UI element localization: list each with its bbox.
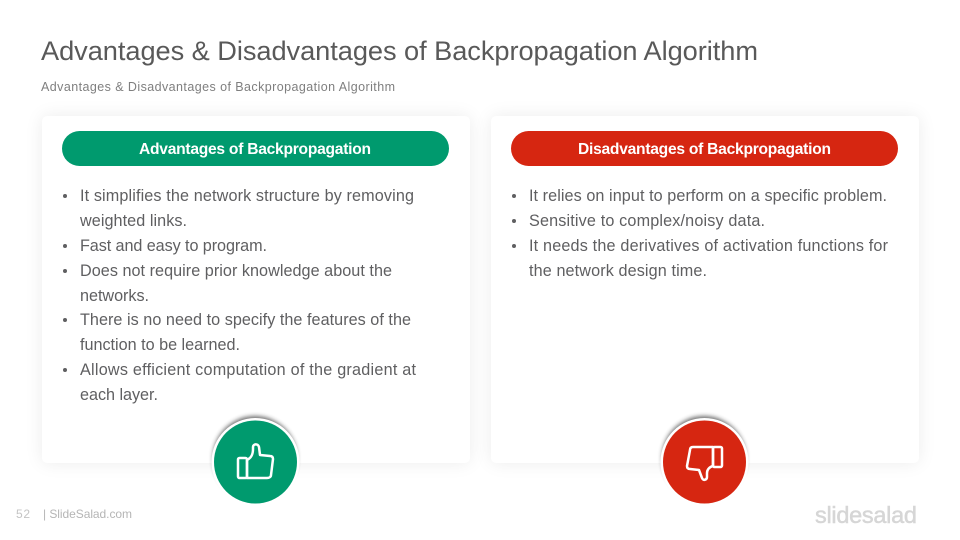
disadvantages header pill: Disadvantages of Backpropagation <box>578 141 831 158</box>
footer source: | SlideSalad.com <box>43 507 132 521</box>
advantages list: It simplifies the network structure by removing <box>80 187 414 205</box>
advantages header pill: Advantages of Backpropagation <box>139 141 371 158</box>
icon: thumbs down badge <box>660 416 748 506</box>
advantages list: Allows efficient computation of the gradient at <box>80 361 416 379</box>
disadvantages list: Sensitive to complex/noisy data. <box>529 212 765 230</box>
panel: advantages card <box>42 116 470 463</box>
page number: 52 <box>16 507 30 521</box>
title: Advantages & Disadvantages of Backpropagation Algorithm <box>41 35 758 66</box>
disadvantages list: the network design time. <box>529 262 707 280</box>
advantages list: weighted links. <box>79 212 187 230</box>
logo: slidesalad <box>815 502 917 528</box>
panel: disadvantages card <box>491 116 919 463</box>
advantages list: function to be learned. <box>80 336 240 354</box>
disadvantages list: It relies on input to perform on a specific problem. <box>529 187 887 205</box>
advantages header pill <box>62 131 449 166</box>
disadvantages header pill <box>511 131 898 166</box>
disadvantages list: It needs the derivatives of activation functions for <box>529 237 889 255</box>
icon: thumbs up badge <box>212 416 300 506</box>
advantages list: There is no need to specify the features of the <box>80 311 411 329</box>
advantages list: Does not require prior knowledge about the <box>80 262 392 280</box>
advantages list: each layer. <box>80 386 158 404</box>
advantages list: Fast and easy to program. <box>80 237 267 255</box>
advantages list <box>63 187 416 404</box>
advantages list: networks. <box>80 287 149 305</box>
subtitle: Advantages & Disadvantages of Backpropagation Algorithm <box>41 80 395 94</box>
disadvantages list <box>512 187 889 280</box>
